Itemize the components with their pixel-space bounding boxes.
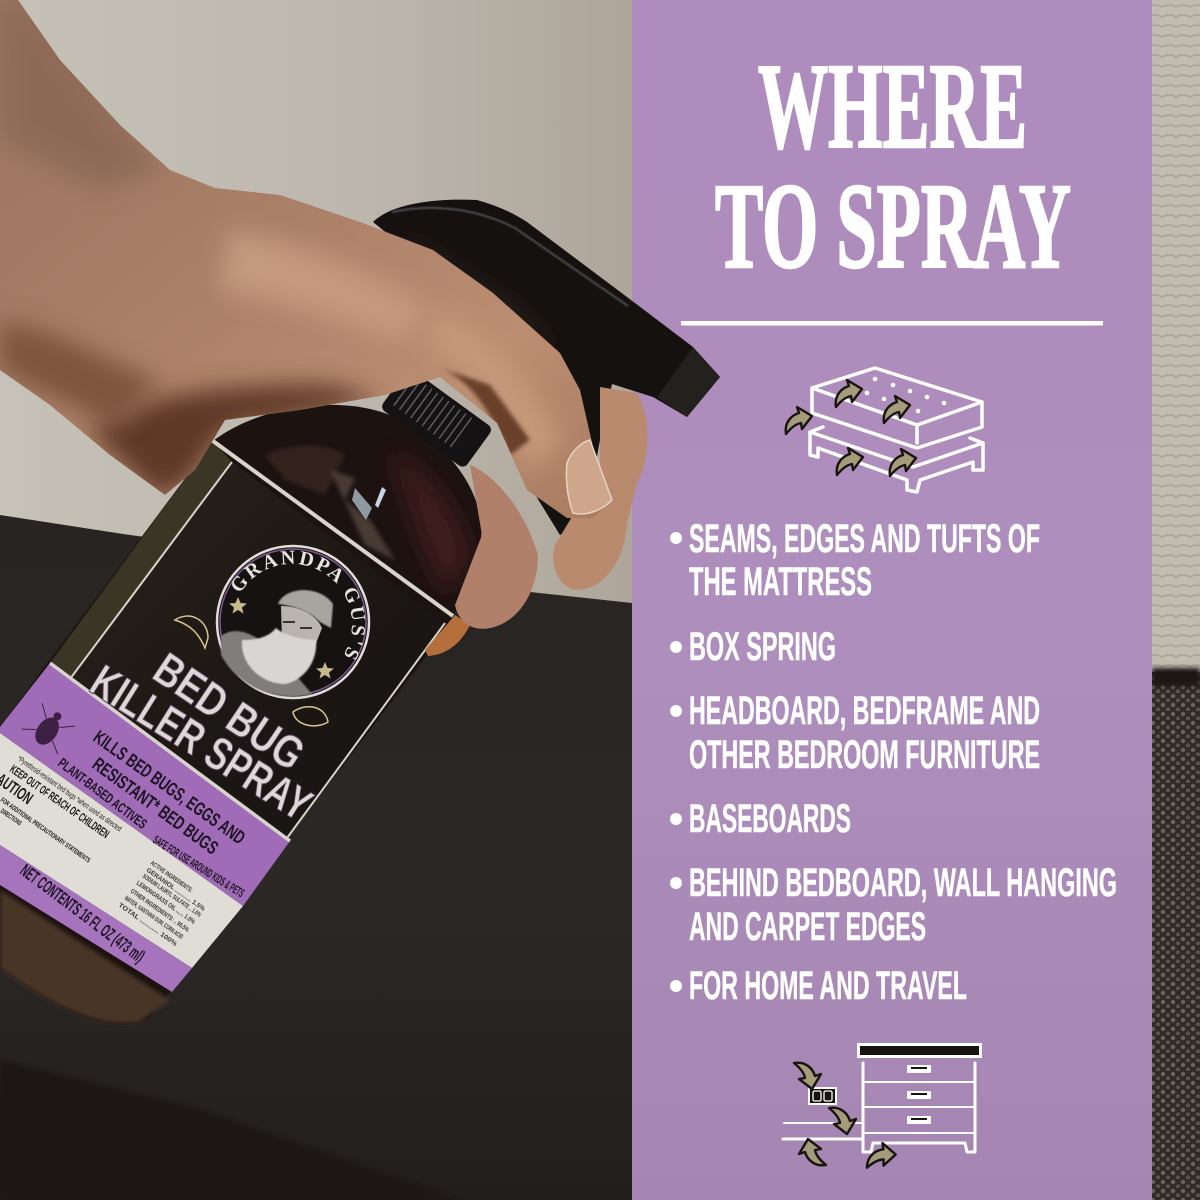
label: active ingredients: ACTIVE INGREDIENTS: <box>149 860 194 894</box>
drawer handles <box>907 1065 931 1124</box>
label: purple claims band <box>0 663 290 906</box>
label: left translucent strip <box>50 441 232 679</box>
panel: where to spray <box>632 0 1152 1200</box>
label: claim text: RESISTANT* BED BUGS <box>88 754 222 859</box>
item: behind bedboard: AND CARPET EDGES <box>689 905 926 949</box>
panel background <box>632 0 1152 1200</box>
item: behind bedboard <box>670 861 1117 949</box>
label: warnings text: KEEP OUT OF REACH OF CHILDREN <box>7 762 112 841</box>
label: warnings text: *Pyrethroid-resistant bed bugs *when used as directed <box>16 754 123 833</box>
label: warnings text: FOR ADDITIONAL PRECAUTIONARY STATEMENTS <box>0 797 92 865</box>
label: active ingredients: TOTAL ........... 100% <box>117 902 178 948</box>
product title: BED BUG <box>144 642 314 780</box>
bottle bottom glass <box>0 890 170 1023</box>
nozzle tip <box>657 347 720 417</box>
photo: bottle cap <box>380 367 493 469</box>
label: gold leaf ornaments <box>175 616 328 726</box>
item: headboard <box>670 689 1040 777</box>
label: active ingredients <box>117 860 206 948</box>
label: active ingredients: WATER, XANTHAN GUM, CORN ACID <box>123 895 184 941</box>
logo: grandpa portrait <box>221 590 333 696</box>
photo: right edge of sofa <box>1152 0 1200 1200</box>
icon: mattress and box spring <box>786 368 983 492</box>
photo background: sofa seat seam shadow <box>0 1060 460 1200</box>
label: claim text <box>55 727 249 900</box>
label: purple net contents band <box>0 845 192 992</box>
photo background: wall <box>0 0 632 610</box>
label: warnings text: DIRECTIONS <box>0 808 23 828</box>
title <box>715 39 1071 294</box>
logo: stars <box>229 597 334 678</box>
label: active ingredients: GERANIOL ........... 1.5% <box>145 867 206 913</box>
photo: spray trigger head <box>373 200 720 535</box>
arrow markers <box>786 380 916 476</box>
logo badge <box>216 544 370 700</box>
label: white info band <box>0 733 243 968</box>
wall outlet <box>808 1087 837 1105</box>
photo: hand <box>0 0 612 518</box>
label: claim text: SAFE FOR USE AROUND KIDS & PETS <box>150 833 247 900</box>
label: active ingredients: LEMONGRASS OIL ...... 1.0% <box>135 880 196 926</box>
ring finger <box>455 465 538 629</box>
label: black panel <box>70 462 445 838</box>
thumbnail <box>566 440 612 514</box>
icon: bed bug on label <box>21 700 78 756</box>
item: home and travel: FOR HOME AND TRAVEL <box>689 964 967 1008</box>
bottle shoulder highlights <box>265 446 470 595</box>
logo: brand name: GRANDPA GUS'S <box>232 550 366 660</box>
photo: lower fingers <box>425 387 648 656</box>
label: net contents: NET CONTENTS 16 FL OZ (473 ml) <box>17 860 148 966</box>
product title: KILLER SPRAY <box>82 654 321 831</box>
item: baseboards: BASEBOARDS <box>689 797 851 841</box>
hand shading <box>0 0 560 500</box>
item: baseboards <box>670 797 851 841</box>
label: warnings text <box>0 754 123 865</box>
label: active ingredients: SODIUM LAURYL SULFATE .. 1.0% <box>141 873 202 919</box>
product title <box>82 642 321 831</box>
middle finger <box>553 387 648 590</box>
label: claim text: KILLS BED BUGS, EGGS AND <box>89 727 249 849</box>
item: mattress: THE MATTRESS <box>689 560 872 604</box>
arrow markers <box>794 1063 897 1172</box>
label: claim text: PLANT-BASED ACTIVES <box>55 755 150 832</box>
item: mattress <box>670 517 1040 604</box>
photo background: dark sofa <box>0 515 632 1200</box>
pinky <box>425 615 470 656</box>
bottle glass body <box>0 405 482 1025</box>
item: box spring <box>670 625 836 669</box>
photo: bottle <box>0 404 482 1024</box>
label: active ingredients: OTHER INGREDIENTS: .. 96.5% <box>129 888 190 934</box>
label: border lines <box>70 441 453 838</box>
label: border above purple band <box>50 663 290 841</box>
bullet list <box>670 517 1117 1008</box>
cap ribs <box>394 377 472 447</box>
item: home and travel <box>670 964 967 1008</box>
icon: dresser and baseboard <box>783 1044 980 1172</box>
item: box spring: BOX SPRING <box>689 625 836 669</box>
